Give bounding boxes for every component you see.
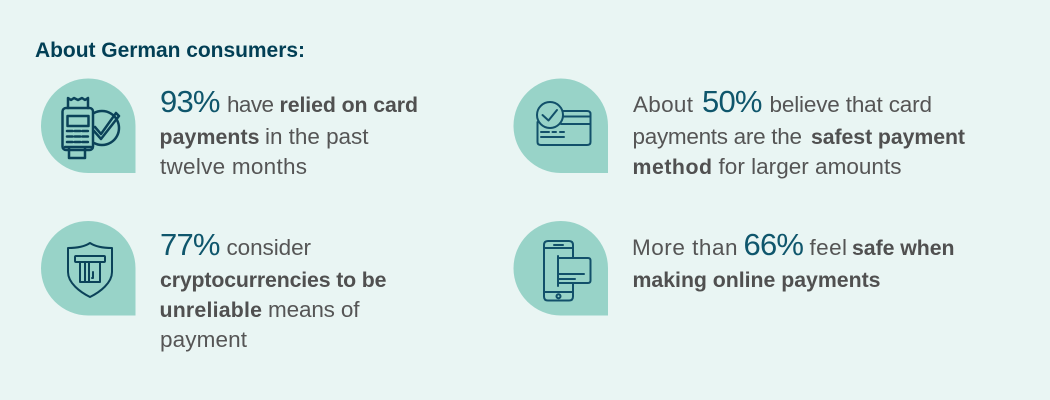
text block: online payments: feel	[810, 235, 847, 260]
text block: cryptocurrencies	[160, 227, 387, 352]
text block: card payments: twelve months	[160, 154, 307, 179]
text block: safest method: method	[632, 155, 712, 179]
text block: card payments: 93%	[160, 84, 220, 119]
text block: card payments: have	[227, 92, 274, 117]
text block: cryptocurrencies: 77%	[160, 227, 220, 262]
icon: smartphone with card	[514, 221, 608, 316]
text block: cryptocurrencies: unreliable	[160, 298, 262, 322]
text block: card payments: relied on card	[280, 93, 418, 117]
text block: online payments: 66%	[744, 227, 804, 262]
text block: cryptocurrencies: means of	[268, 297, 360, 322]
text block: safest method: believe that card	[770, 92, 932, 117]
text block: safest method	[632, 84, 965, 179]
text block: online payments: More than	[632, 235, 738, 260]
text block: card payments	[160, 84, 418, 179]
text block: card payments: payments	[160, 125, 260, 149]
text block: safest method: payments are the	[632, 124, 802, 149]
text block: card payments: in the past	[265, 124, 369, 149]
text block: safest method: for larger amounts	[718, 154, 902, 179]
text block: safest method: safest payment	[811, 125, 965, 149]
text block: cryptocurrencies: consider	[226, 235, 312, 260]
text block: cryptocurrencies: cryptocurrencies to be	[160, 268, 387, 292]
title: About German consumers:	[35, 39, 305, 62]
text block: cryptocurrencies: payment	[160, 327, 248, 352]
text block: online payments	[632, 227, 954, 292]
icon: payment terminal with check	[41, 78, 136, 173]
text block: safest method: About	[633, 92, 694, 117]
text block: safest method: 50%	[702, 84, 762, 119]
icon: card with check badge	[514, 78, 608, 173]
icon: shield with cash machine	[41, 221, 136, 316]
text block: online payments: making online payments	[632, 268, 880, 292]
text block: online payments: safe when	[852, 236, 954, 260]
